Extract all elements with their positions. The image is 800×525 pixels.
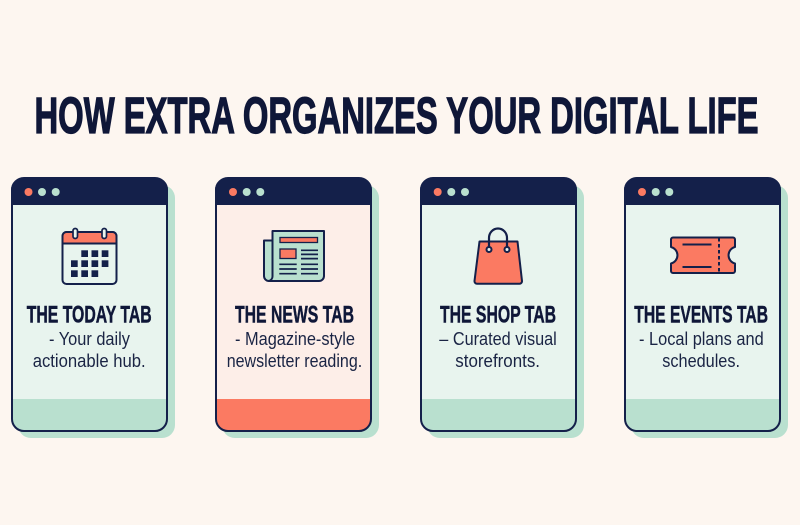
text: events description: - Local plans and: [639, 328, 764, 349]
heading: the news tab: THE NEWS TAB: [235, 301, 354, 328]
icon: ticket: [671, 238, 735, 273]
icon: calendar: [62, 228, 116, 284]
text: today description: - Your daily: [49, 328, 131, 349]
text: events description: [639, 328, 764, 371]
icon: shopping bag: [474, 228, 522, 284]
text: events description: schedules.: [662, 350, 740, 371]
icon: newspaper: [264, 231, 324, 281]
text: news description: - Magazine-style: [235, 328, 355, 349]
panel: the shop tab: [420, 178, 584, 438]
panel: the events tab: [624, 178, 788, 438]
panel: the news tab: [215, 178, 379, 438]
heading: the today tab: THE TODAY TAB: [27, 301, 152, 328]
text: news description: newsletter reading.: [227, 350, 362, 371]
text: shop description: – Curated visual: [439, 328, 557, 349]
text: news description: [227, 328, 362, 371]
text: shop description: storefronts.: [455, 350, 540, 371]
text: shop description: [439, 328, 557, 371]
text: today description: [33, 328, 146, 371]
text: today description: actionable hub.: [33, 350, 146, 371]
panel: the today tab: [11, 178, 175, 438]
heading: the shop tab: THE SHOP TAB: [440, 301, 556, 328]
